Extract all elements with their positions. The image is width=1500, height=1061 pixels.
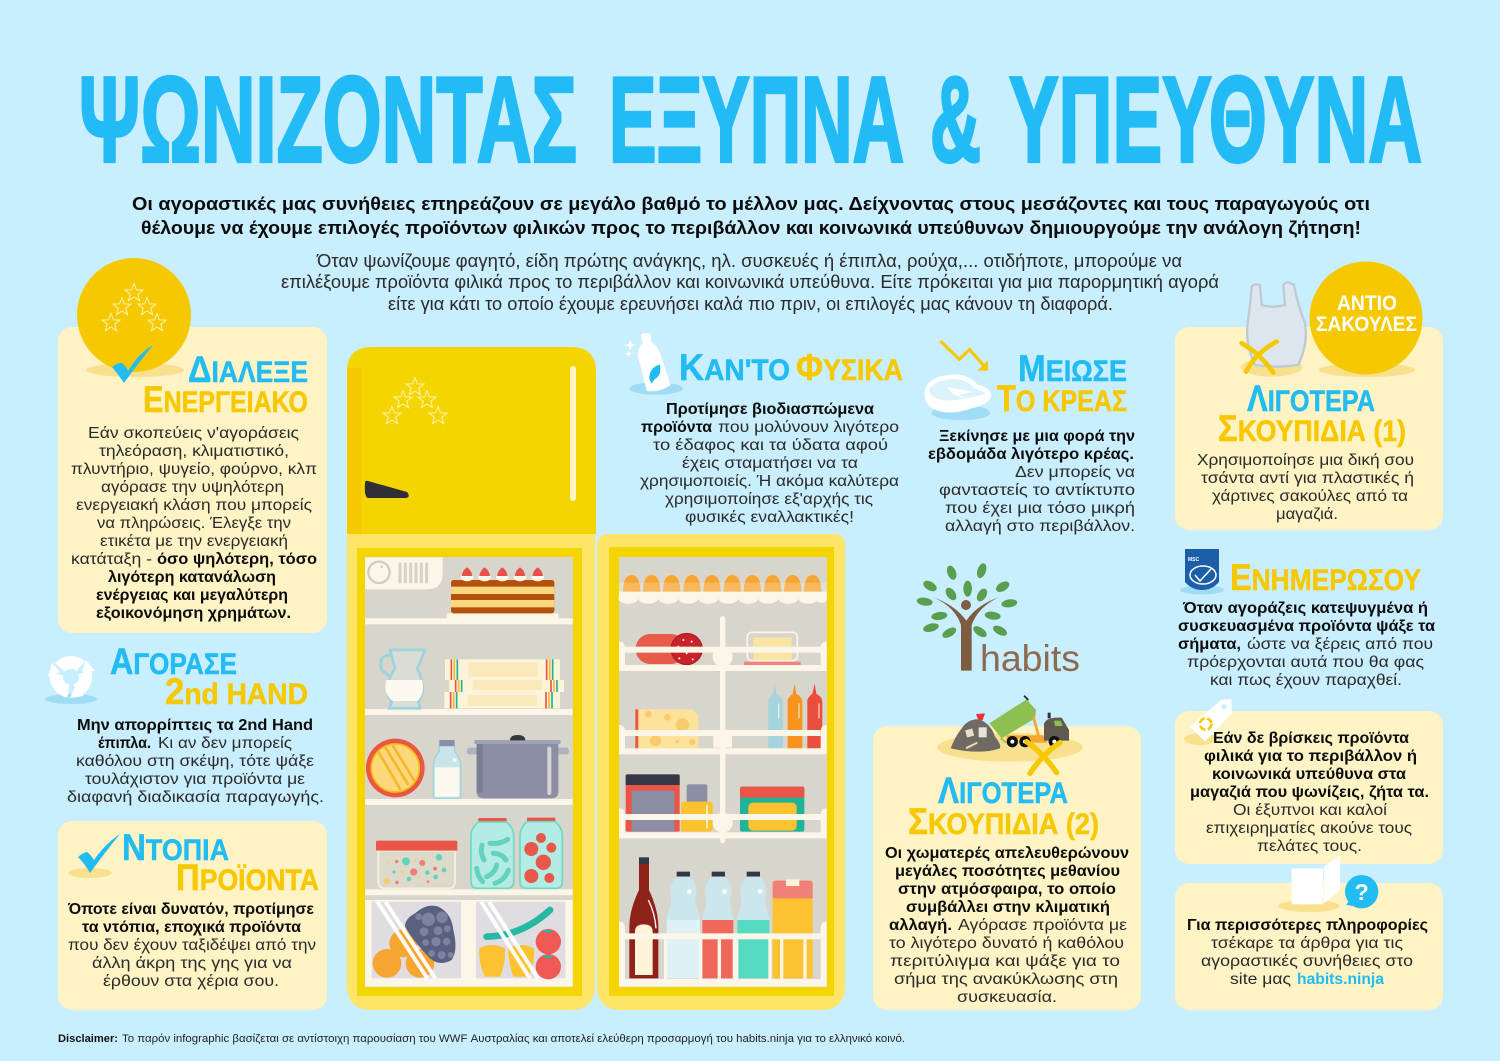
title: &	[930, 52, 981, 188]
text: second hand: έπιπλα.	[98, 735, 151, 752]
towels stack	[444, 659, 564, 708]
text: energy	[71, 425, 317, 622]
text: natural: φυσικές εναλλακτικές!	[685, 509, 854, 526]
panel: less waste 2	[873, 696, 1141, 1010]
text: waste 2: συσκευασία.	[957, 989, 1057, 1006]
text: waste 2: μεγάλες ποσότητες μεθανίου	[895, 863, 1120, 880]
text: ask: Εάν δε βρίσκεις προϊόντα	[1213, 730, 1409, 747]
text: meat: που έχει μια τόσο μικρή	[945, 500, 1135, 517]
text: natural: το έδαφος και τα ύδατα αφού	[653, 437, 888, 454]
text: local: Όποτε είναι δυνατόν, προτίμησε	[67, 901, 314, 918]
text: second hand: τουλάχιστον για προϊόντα με	[85, 771, 305, 788]
jar of pickles	[471, 818, 514, 888]
water bottles	[667, 872, 769, 978]
text: energy: τηλεόραση, κλιματιστικό,	[99, 443, 289, 460]
intro paragraph: είτε για κάτι το οποίο έχουμε ερευνήσει καλά πιο πριν, οι επιλογές μας κάνουν τη διαφορά.	[388, 294, 1113, 314]
panel: less meat	[925, 341, 1135, 535]
text: energy: ετικέτα με την ενεργειακή	[100, 533, 288, 550]
text: local: που δεν έχουν ταξιδέψει από την	[68, 937, 316, 954]
icon: booklet and question: ?	[1355, 879, 1369, 905]
juice carton	[773, 879, 813, 978]
badge: bags circle	[1310, 262, 1422, 374]
text: natural: έχεις σταματήσει να τα	[682, 455, 858, 472]
butter dish	[744, 632, 801, 665]
door rack 3	[619, 808, 827, 838]
milk jug	[381, 650, 425, 708]
panel: less waste 1	[1175, 262, 1443, 530]
door centre bar	[720, 616, 725, 843]
icon: five stars	[102, 284, 166, 331]
text: energy: ενέργειας και μεγαλύτερη	[96, 587, 288, 604]
text: informed: Όταν αγοράζεις κατεψυγμένα ή	[1182, 600, 1428, 617]
icon: detergent bottle	[625, 333, 683, 395]
heading: energy: ΔΙΑΛΕΞΕ	[188, 349, 308, 390]
text: ask: φιλικά για το περιβάλλον ή	[1204, 748, 1417, 765]
text: waste 2: αλλαγή.	[889, 917, 952, 934]
text: meat: εβδομάδα λιγότερο κρέας.	[928, 446, 1134, 463]
heading: waste 2	[908, 770, 1099, 842]
heading: natural	[679, 347, 903, 388]
badge: bags circle: ΣΑΚΟΥΛΕΣ	[1316, 313, 1417, 336]
text: more information: site μας	[1230, 971, 1291, 988]
heading: second hand: 2nd HAND	[165, 671, 308, 712]
text: energy: αγόρασε την υψηλότερη	[101, 479, 284, 496]
text: natural: Προτίμησε βιοδιασπώμενα	[666, 401, 874, 418]
text: waste 1: χάρτινες σακούλες από τα	[1212, 488, 1408, 505]
text: waste 2: στην ατμόσφαιρα, το οποίο	[898, 881, 1116, 898]
salami	[636, 633, 702, 665]
text: informed: και πως έχουν παραχθεί.	[1210, 672, 1402, 689]
text: second hand: Μην απορρίπτεις τα 2nd Hand	[77, 717, 313, 734]
text: energy: πλυντήριο, ψυγείο, φούρνο, κλπ	[71, 461, 317, 478]
door rack 2	[619, 725, 827, 754]
panel: ask for products	[1175, 699, 1443, 864]
text: waste 1: Χρησιμοποίησε μια δική σου	[1197, 452, 1414, 469]
lead statement: Οι αγοραστικές μας συνήθειες επηρεάζουν σε μεγάλο βαθμό το μέλλον μας. Δείχνοντας στους μεσάζοντες και τους παραγωγούς οτι	[132, 194, 1370, 215]
text: second hand: διαφανή διαδικασία παραγωγής.	[67, 789, 324, 806]
text: ask: κοινωνικά υπεύθυνα στα	[1212, 766, 1406, 783]
text: informed	[1178, 600, 1435, 689]
text: waste 2: συμβάλλει στην κλιματική	[906, 899, 1110, 916]
text: local: τα ντόπια, εποχικά προϊόντα	[82, 919, 301, 936]
jam jar	[626, 774, 680, 832]
icon: eco tag	[1184, 699, 1232, 745]
icon: booklet and question	[1278, 855, 1378, 912]
icon: recycling	[45, 658, 97, 704]
disclaimer: Το παρόν infographic βασίζεται σε αντίστοιχη παρουσίαση του WWF Αυστραλίας και αποτελεί ελεύθερη προσαρμογή του habits.ninja για το ελληνικό κοινό.	[122, 1033, 905, 1045]
text: more information: αγοραστικές συνήθειες στο	[1201, 953, 1413, 970]
heading: energy: ΕΝΕΡΓΕΙΑΚΟ	[143, 379, 308, 420]
heading: waste 1: ΣΚΟΥΠΙΔΙΑ (1)	[1218, 408, 1406, 449]
badge: bags circle: ΑΝΤΙΟ	[1337, 292, 1397, 315]
heading: natural: ΦΥΣΙΚΑ	[796, 347, 903, 388]
text: ask: επιχειρηματίες ακούνε τους	[1206, 820, 1412, 837]
icon: MSC label: MSC	[1188, 557, 1200, 563]
mustard bottle	[681, 784, 713, 832]
text: informed: πρόερχονται αυτά που θα φας	[1187, 654, 1424, 671]
intro paragraph: επιλέξουμε προϊόντα φιλικά προς το περιβάλλον και κοινωνικά υπεύθυνα. Είτε πρόκειται για μια παρορμητική αγορά	[281, 272, 1219, 292]
heading: meat: ΤΟ ΚΡΕΑΣ	[997, 378, 1127, 419]
text: meat: φανταστείς το αντίκτυπο	[939, 482, 1135, 499]
heading: informed: ΕΝΗΜΕΡΩΣΟΥ	[1230, 557, 1421, 598]
heading: second hand: ΑΓΟΡΑΣΕ	[110, 641, 237, 682]
title: ΨΩΝΙΖΟΝΤΑΣ	[79, 52, 577, 188]
icon: MSC label	[1180, 549, 1224, 594]
panel: get informed	[1178, 549, 1435, 689]
text: more information	[1187, 917, 1428, 988]
heading: local: ΝΤΟΠΙΑ	[122, 827, 229, 868]
text: energy: Εάν σκοπεύεις ν'αγοράσεις	[88, 425, 299, 442]
text: informed: συσκευασμένα προϊόντα ψάξε τα	[1178, 618, 1435, 635]
jar of tomatoes	[520, 818, 562, 888]
fridge illustration	[347, 347, 845, 1010]
title	[79, 52, 1422, 188]
cake	[447, 567, 558, 619]
panel: natural products	[625, 333, 903, 526]
text: energy: όσο ψηλότερη, τόσο	[157, 551, 317, 568]
panel: energy class	[58, 258, 327, 633]
title: ΕΞΥΠΝΑ	[609, 52, 904, 188]
heading: energy	[143, 349, 308, 420]
text: energy: λιγότερη κατανάλωση	[108, 569, 276, 586]
text: local: έρθουν στα χέρια σου.	[103, 973, 279, 990]
logo: habits tree	[916, 562, 1080, 679]
text: local: άλλη άκρη της γης για να	[92, 955, 292, 972]
text: waste 1: μαγαζιά.	[1276, 506, 1338, 523]
text: second hand	[67, 717, 324, 806]
sauce bottles	[768, 683, 822, 748]
control panel	[365, 557, 443, 589]
cheese	[635, 709, 698, 748]
text: waste 2: Οι χωματερές απελευθερώνουν	[885, 845, 1129, 862]
intro paragraph: Όταν ψωνίζουμε φαγητό, είδη πρώτης ανάγκης, ηλ. συσκευές ή έπιπλα, ρούχα,... οτιδήποτε, μπορούμε να	[316, 251, 1182, 271]
wine bottle	[629, 857, 658, 978]
icon: plastic bag crossed	[1241, 282, 1306, 377]
text: informed: ώστε να ξέρεις από που	[1247, 636, 1433, 653]
open door frame	[597, 534, 845, 1010]
heading: natural: ΚΑΝ'ΤΟ	[679, 347, 790, 388]
text: natural	[640, 401, 899, 526]
text: more information: habits.ninja	[1297, 971, 1384, 988]
text: energy: ενεργειακή κλάση που μπορείς	[76, 497, 312, 514]
text: meat: αλλαγή στο περιβάλλον.	[945, 518, 1135, 535]
text: more information: τσέκαρε τα άρθρα για τις	[1211, 935, 1403, 952]
heading: waste 2: ΣΚΟΥΠΙΔΙΑ (2)	[908, 801, 1099, 842]
leftovers container	[376, 841, 457, 888]
green box	[740, 787, 804, 832]
text: natural: που μολύνουν λιγότερο	[718, 419, 899, 436]
heading: second hand	[110, 641, 308, 712]
heading: local: ΠΡΟΪΟΝΤΑ	[176, 857, 319, 898]
text: waste 2: το λιγότερο δυνατό ή καθόλου	[889, 935, 1124, 952]
heading: meat: ΜΕΙΩΣΕ	[1018, 348, 1127, 389]
text: ask: Οι έξυπνοι και καλοί	[1233, 802, 1387, 819]
heading: meat	[997, 348, 1127, 419]
text: natural: χρησιμοποίησε εξ'αρχής τις	[665, 491, 873, 508]
text: energy: κατάταξη -	[71, 551, 152, 568]
text: waste 1: τσάντα αντί για πλαστικές ή	[1201, 470, 1414, 487]
cooking pot	[467, 735, 569, 798]
disclaimer: Disclaimer:	[58, 1033, 118, 1045]
text: ask: πελάτες τους.	[1257, 838, 1362, 855]
egg tray	[618, 575, 827, 604]
text: meat: Δεν μπορείς να	[1015, 464, 1135, 481]
icon: check mark	[112, 345, 153, 383]
plate	[366, 739, 425, 797]
milk bottle	[433, 740, 461, 798]
text: energy: εξοικονόμηση χρημάτων.	[96, 605, 291, 622]
text: ask	[1190, 730, 1429, 855]
heading: waste 1: ΛΙΓΟΤΕΡΑ	[1247, 378, 1375, 419]
text: natural: προϊόντα	[641, 419, 712, 436]
icon: garbage truck	[937, 696, 1083, 773]
heading: waste 2: ΛΙΓΟΤΕΡΑ	[938, 770, 1068, 811]
lead statement	[132, 194, 1370, 239]
text: waste 2: σήμα της ανακύκλωσης στη	[894, 971, 1118, 988]
lead statement: θέλουμε να έχουμε επιλογές προϊόντων φιλικών προς το περιβάλλον και κοινωνικά υπεύθυνων δημιουργούμε την ανάλογη ζήτηση!	[141, 218, 1361, 239]
intro paragraph	[281, 251, 1219, 314]
text: ask: μαγαζιά που ψωνίζεις, ζήτα τα.	[1190, 784, 1429, 801]
bottom drawers	[365, 895, 573, 987]
shelves	[365, 618, 573, 895]
logo: habits tree: habits	[980, 638, 1080, 679]
text: waste 1	[1197, 452, 1414, 523]
freezer door	[347, 347, 596, 534]
heading: local	[122, 827, 319, 898]
text: informed: σήματα,	[1178, 636, 1241, 653]
icon: steak and falling arrow	[925, 341, 991, 420]
icon: check mark local	[78, 834, 120, 873]
text: meat: Ξεκίνησε με μια φορά την	[939, 428, 1135, 445]
text: second hand: καθόλου στη σκέψη, τότε ψάξε	[76, 753, 314, 770]
text: waste 2	[885, 845, 1129, 1006]
text: waste 2: Αγόρασε προϊόντα με	[958, 917, 1127, 934]
door rack bottom	[619, 922, 827, 987]
fridge body frame	[347, 534, 595, 1010]
text: second hand: Κι αν δεν μπορείς	[158, 735, 292, 752]
panel: local products	[58, 821, 327, 1010]
text: local	[67, 901, 316, 990]
text: natural: χρησιμοποιείς. Ή ακόμα καλύτερα	[640, 473, 899, 490]
text: energy: να πληρώσεις. Έλεγξε την	[97, 515, 291, 532]
text: waste 2: περιτύλιγμα και ψάξε για το	[890, 953, 1120, 970]
heading: waste 1	[1218, 378, 1406, 449]
door rack 1	[619, 642, 827, 671]
text: more information: Για περισσότερες πληροφορίες	[1187, 917, 1428, 934]
text: meat	[928, 428, 1135, 535]
panel: second hand	[45, 641, 324, 806]
panel: more information	[1175, 855, 1443, 1010]
